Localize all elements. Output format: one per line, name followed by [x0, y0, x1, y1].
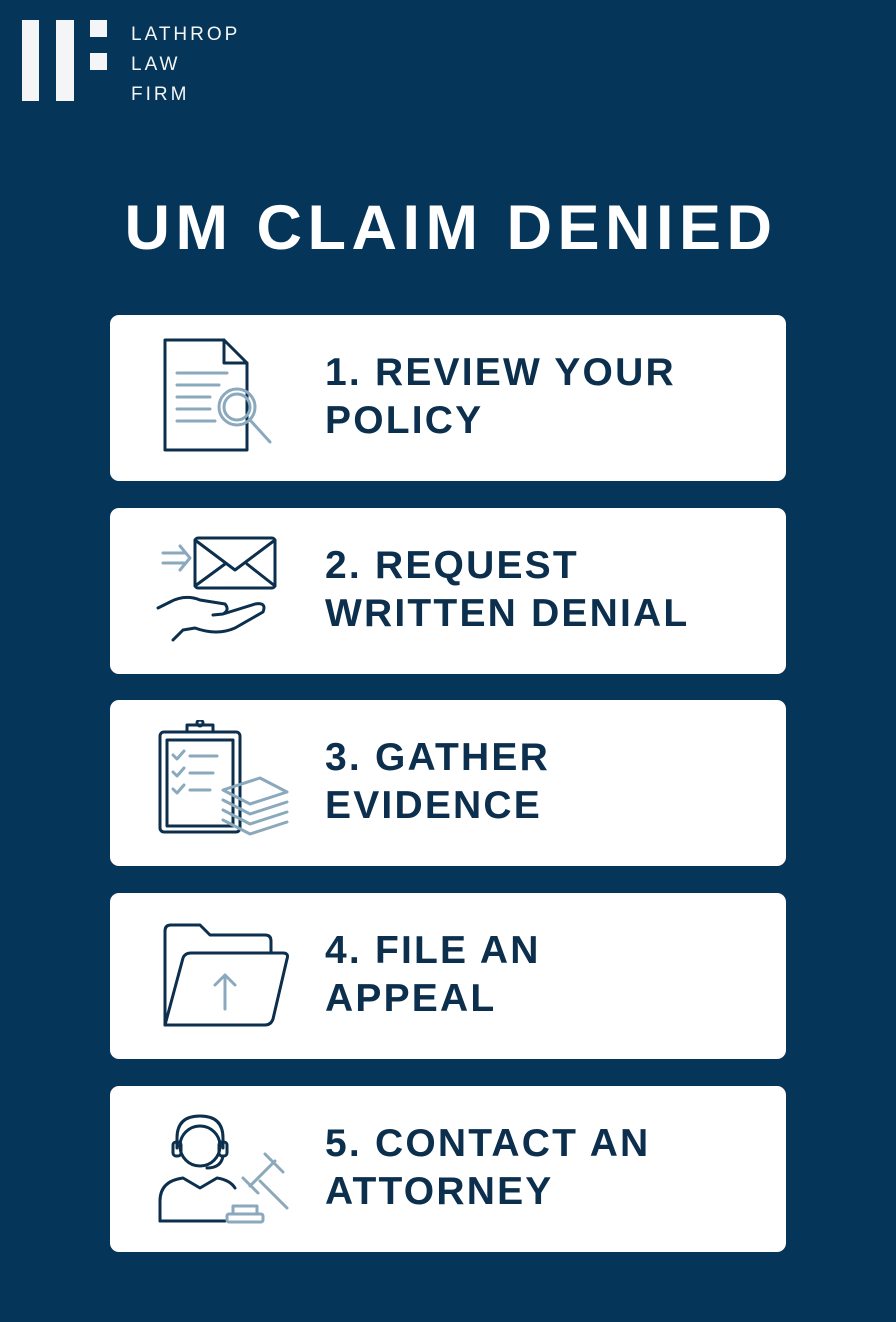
icon: folder with upload arrow: [164, 924, 289, 1026]
title: UM CLAIM DENIED: [124, 193, 777, 263]
logo text: FIRM: [131, 84, 189, 105]
icon: person with headset and gavel: [158, 1114, 288, 1224]
card 3: [110, 700, 786, 866]
card 4: 4. FILE AN: [325, 929, 541, 972]
logo text: LATHROP: [131, 24, 240, 45]
icon: envelope and hand: [156, 536, 277, 642]
card 2: [110, 508, 786, 674]
logo: [22, 20, 240, 105]
icon: clipboard and papers: [158, 720, 288, 836]
card 5: ATTORNEY: [325, 1170, 554, 1213]
card 2: WRITTEN DENIAL: [325, 592, 689, 635]
card 1: POLICY: [325, 399, 483, 442]
logo text: LAW: [131, 54, 180, 75]
card 1: 1. REVIEW YOUR: [325, 351, 676, 394]
card 5: [110, 1086, 786, 1252]
card 3: 3. GATHER: [325, 736, 550, 779]
card 5: 5. CONTACT AN: [325, 1122, 650, 1165]
card 4: APPEAL: [325, 977, 496, 1020]
card 3: EVIDENCE: [325, 784, 542, 827]
logo text: [131, 24, 240, 105]
card 2: 2. REQUEST: [325, 544, 579, 587]
icon: document with magnifier: [164, 338, 272, 452]
card 4: [110, 893, 786, 1059]
card 1: [110, 315, 786, 481]
